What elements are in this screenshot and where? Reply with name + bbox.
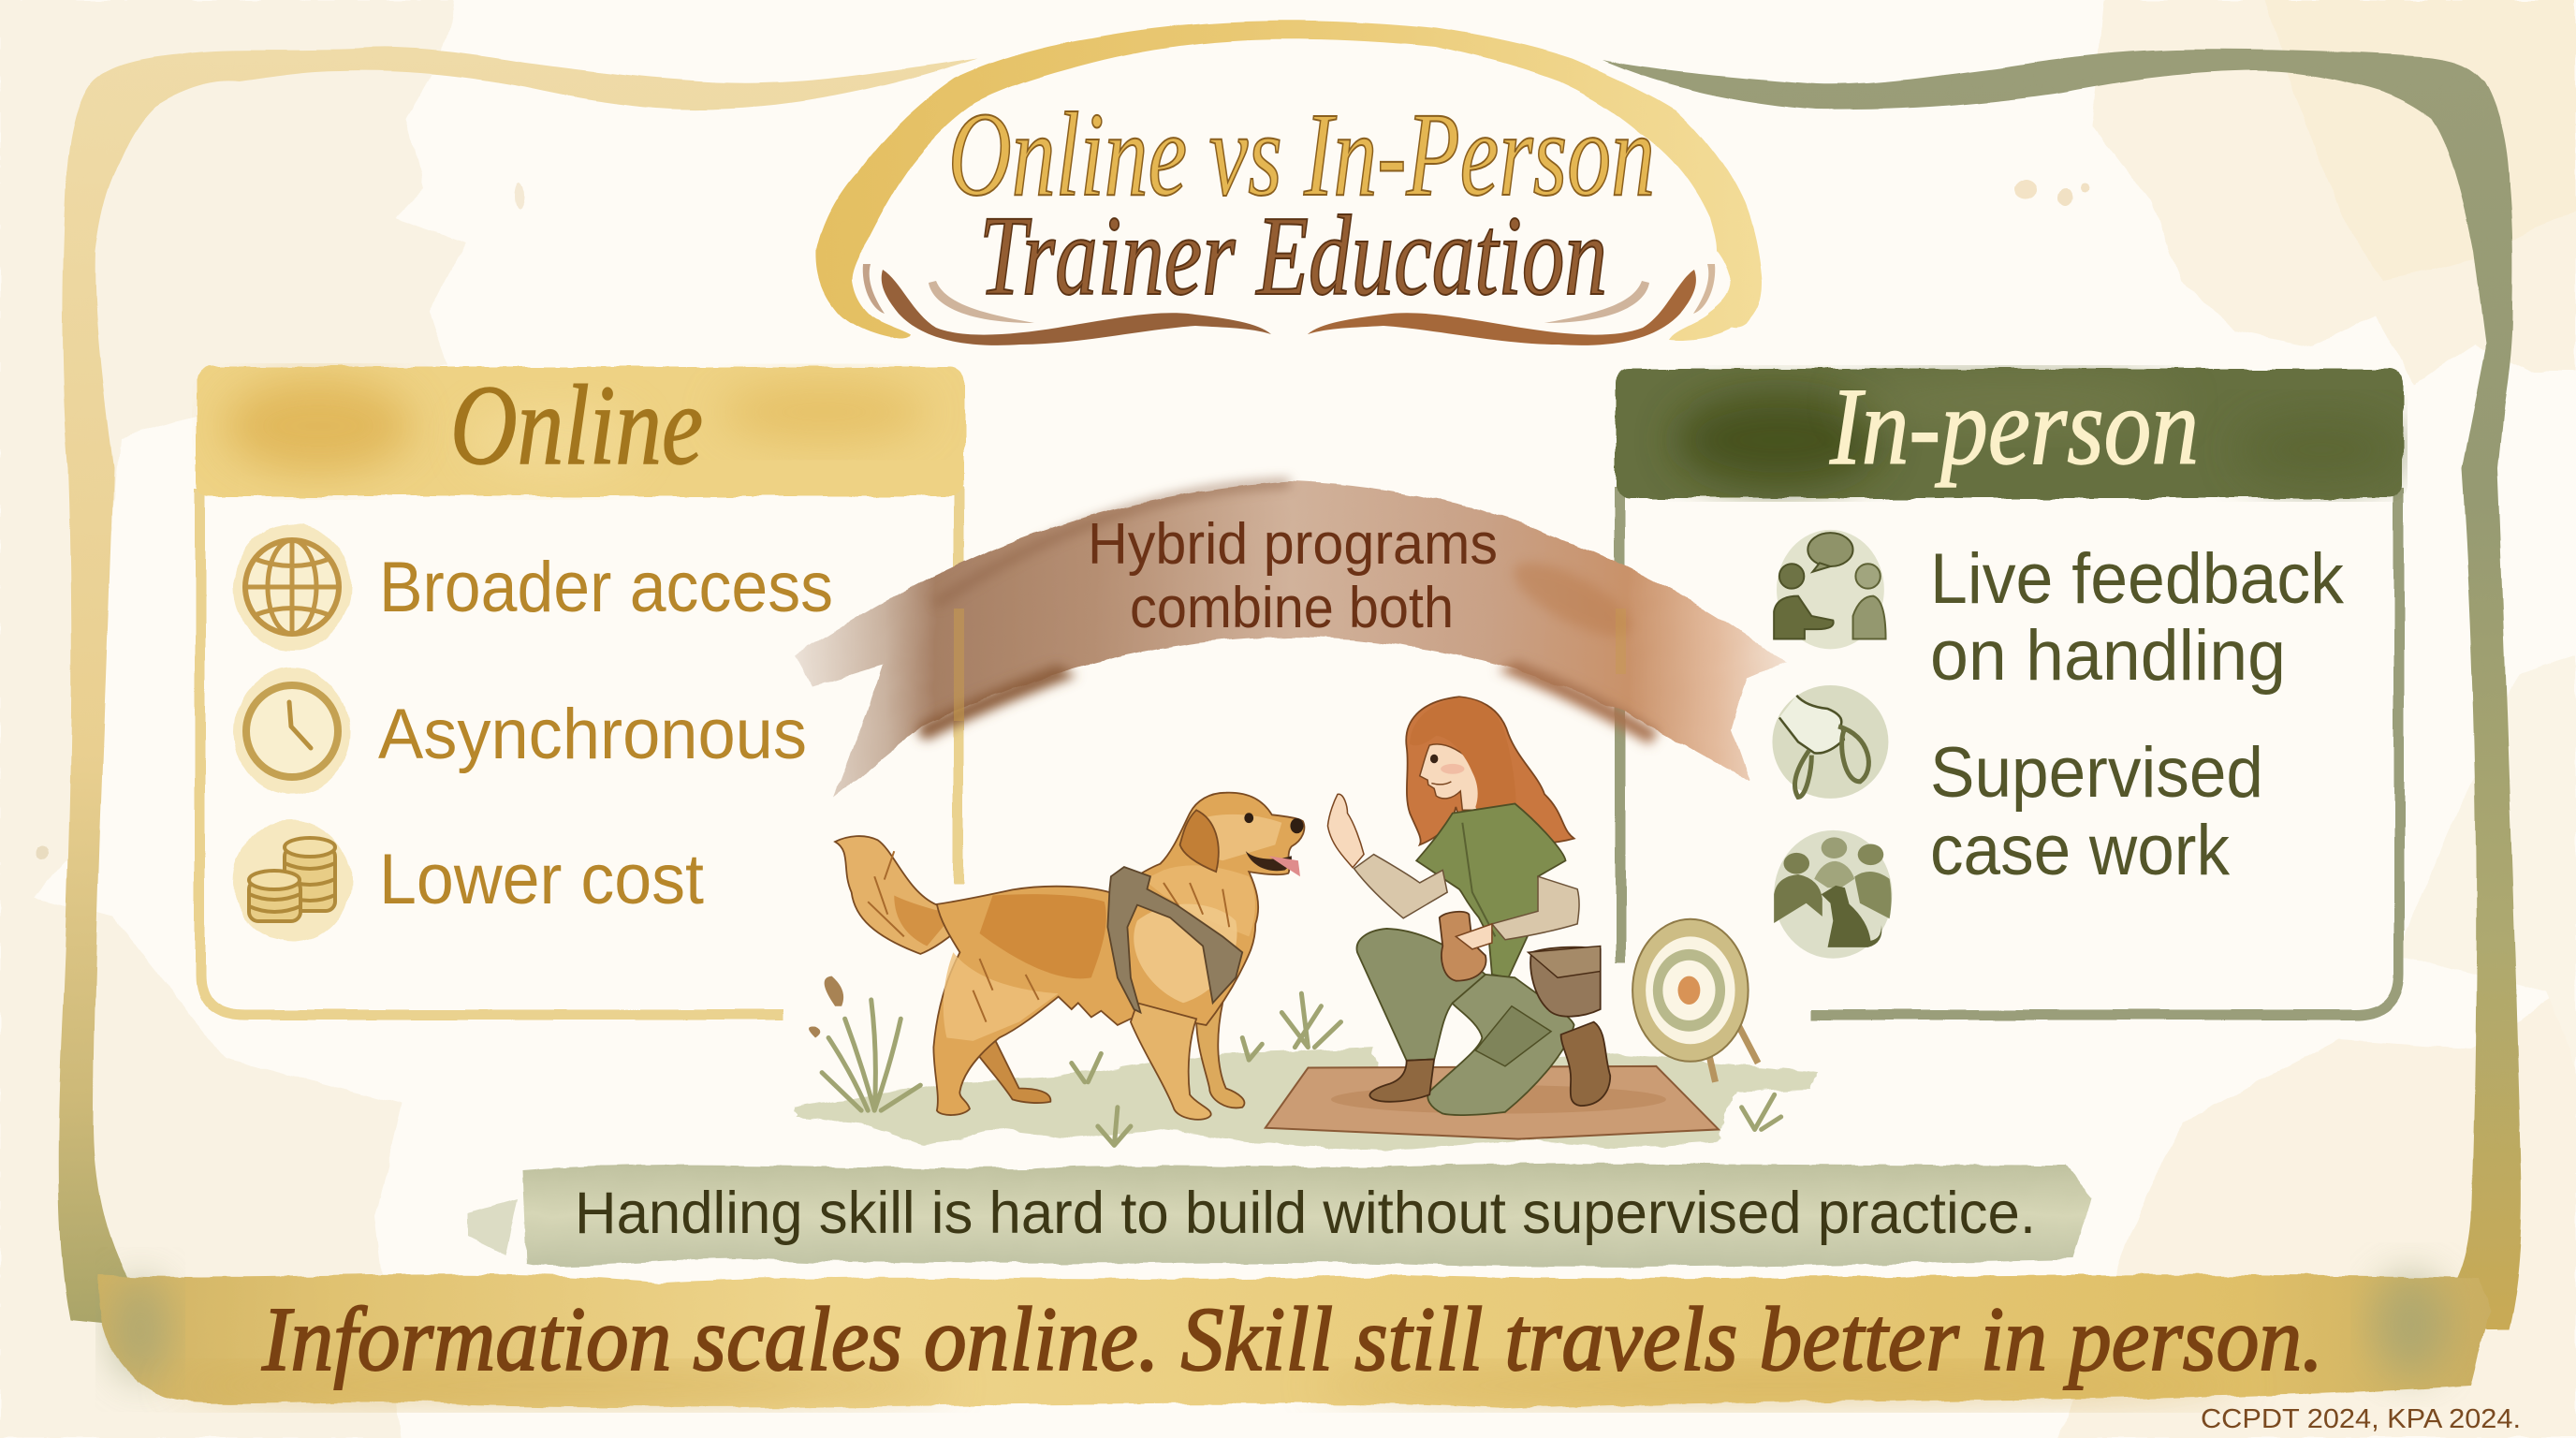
in-person panel border bbox=[1620, 487, 2399, 1015]
dog harness bbox=[1107, 867, 1242, 1012]
icon: live feedback group bbox=[1774, 530, 1886, 649]
item text: asynchronous: Asynchronous bbox=[378, 695, 807, 774]
item text: live feedback on handling bbox=[1930, 539, 2345, 696]
icon: globe bbox=[233, 523, 351, 651]
shirt bbox=[1416, 803, 1566, 977]
in-person header band: In-person bbox=[1829, 365, 2199, 488]
item text: lower cost: Lower cost bbox=[379, 840, 704, 919]
trainer bbox=[1327, 697, 1610, 1115]
item text: supervised case work: case work bbox=[1930, 811, 2231, 890]
raised hand bbox=[1327, 794, 1364, 868]
panel: online bbox=[196, 362, 964, 1015]
note band: handling skill bbox=[468, 1164, 2092, 1267]
online panel border bbox=[200, 487, 959, 1015]
face bbox=[1420, 744, 1479, 810]
hair front bbox=[1410, 697, 1516, 860]
icon: clock bbox=[234, 668, 350, 795]
item text: supervised case work: Supervised bbox=[1930, 733, 2263, 813]
title flourishes bbox=[863, 264, 1715, 345]
trousers bbox=[1357, 929, 1492, 1061]
item text: broader access: Broader access bbox=[379, 548, 833, 627]
online header band bbox=[196, 362, 964, 496]
title cartouche arch bbox=[817, 21, 1762, 345]
banner text: combine both bbox=[1130, 576, 1454, 640]
target bbox=[1632, 919, 1758, 1082]
title: Online vs In-Person bbox=[948, 88, 1655, 221]
banner text: Hybrid programs bbox=[1088, 512, 1498, 577]
note band: handling skill: Handling skill is hard to build without supervised practice. bbox=[575, 1181, 2036, 1246]
icon: hand holding leash bbox=[1772, 685, 1888, 799]
boots bbox=[1369, 1059, 1434, 1102]
icon: group with dog bbox=[1774, 830, 1892, 959]
banner text bbox=[1088, 512, 1498, 640]
item text: supervised case work bbox=[1930, 733, 2263, 890]
item text: live feedback on handling: on handling bbox=[1930, 616, 2286, 696]
item text: live feedback on handling: Live feedback bbox=[1930, 539, 2345, 619]
banner: hybrid programs bbox=[797, 481, 1785, 797]
icon: coins bbox=[233, 820, 351, 942]
title bbox=[948, 88, 1655, 319]
takeaway band: Information scales online. Skill still travels better in person. bbox=[261, 1289, 2323, 1390]
takeaway band bbox=[97, 1273, 2490, 1409]
frame: olive right side bbox=[1603, 50, 2522, 1329]
training mat bbox=[1266, 1066, 1719, 1139]
treat jar bbox=[1440, 912, 1486, 981]
panel: in-person bbox=[1616, 365, 2406, 1015]
illustration: dog and trainer scene bbox=[796, 697, 1821, 1152]
frame: golden left side bbox=[58, 48, 978, 1329]
ground wash bbox=[796, 1048, 1821, 1152]
grass tufts bbox=[822, 993, 1781, 1145]
source citation: CCPDT 2024, KPA 2024. bbox=[2201, 1404, 2521, 1434]
dog bbox=[835, 793, 1304, 1120]
in-person header band bbox=[1616, 365, 2406, 498]
hair back bbox=[1406, 697, 1574, 860]
belt pouch bbox=[1530, 947, 1601, 1017]
title: Trainer Education bbox=[979, 193, 1607, 319]
online header band: Online bbox=[450, 362, 703, 489]
sleeves bbox=[1354, 855, 1447, 918]
